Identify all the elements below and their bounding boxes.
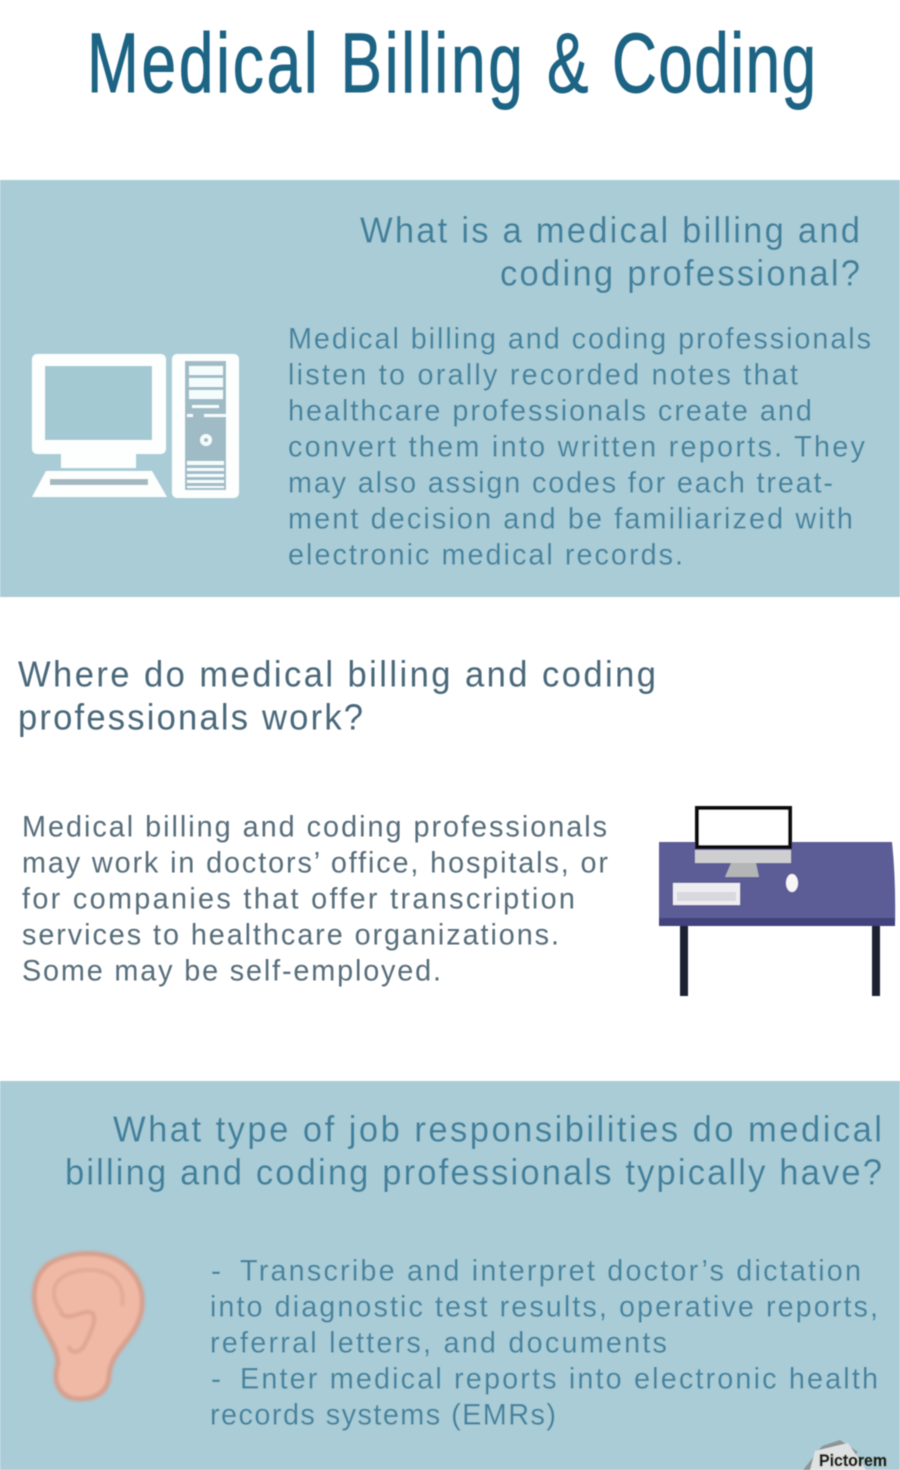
text block: workplaces: for companies that offer transcription (22, 882, 575, 915)
panel: what is a professional (0, 180, 900, 597)
heading: what is a professional: coding professional? (500, 254, 860, 293)
text block: workplaces: services to healthcare organizations. (22, 918, 559, 951)
text block: professional description: electronic medical records. (288, 538, 683, 571)
panel background (0, 1081, 900, 1470)
heading: where they work: Where do medical billing and coding (18, 655, 656, 694)
title: Medical Billing (87, 16, 523, 110)
text block: workplaces: Some may be self-employed. (22, 954, 441, 987)
text block: workplaces: may work in doctors’ office, hospitals, or (22, 846, 608, 879)
text block: responsibilities list: records systems (EMRs) (210, 1398, 556, 1431)
icon: office desk (659, 808, 895, 996)
text block: professional description: Medical billing and coding professionals (288, 322, 871, 355)
heading: what is a professional (360, 211, 860, 293)
text block: responsibilities list: Transcribe and interpret doctor’s dictation (240, 1254, 861, 1287)
heading: where they work: professionals work? (18, 698, 363, 737)
text block: professional description (288, 322, 871, 571)
panel background (0, 180, 900, 597)
text block: professional description: convert them into written reports. They (288, 430, 865, 463)
text block: responsibilities list: into diagnostic test results, operative reports, (210, 1290, 878, 1323)
text block: workplaces: Medical billing and coding professionals (22, 810, 607, 843)
text block: workplaces (22, 810, 608, 987)
heading: job responsibilities: billing and coding professionals typically have? (65, 1153, 882, 1192)
text block: responsibilities list (210, 1254, 878, 1431)
text block: professional description: listen to orally recorded notes that (288, 358, 798, 391)
heading: what is a professional: What is a medical billing and (360, 211, 860, 250)
panel: job responsibilities (0, 1081, 900, 1470)
title: & (547, 16, 588, 110)
heading: job responsibilities (65, 1110, 882, 1192)
text block: professional description: healthcare professionals create and (288, 394, 812, 427)
logo: Pictorem watermark: Pictorem (819, 1451, 887, 1470)
heading: where they work (18, 655, 656, 737)
icon: desktop computer (32, 354, 239, 498)
text block: responsibilities list: referral letters, and documents (210, 1326, 667, 1359)
title: Coding (612, 16, 816, 110)
logo: Pictorem watermark (803, 1440, 887, 1470)
heading: job responsibilities: What type of job responsibilities do medical (113, 1110, 882, 1149)
text block: responsibilities list: Enter medical reports into electronic health (240, 1362, 878, 1395)
text block: responsibilities list: - (211, 1362, 221, 1395)
title (87, 16, 816, 110)
text block: professional description: ment decision and be familiarized with (288, 502, 853, 535)
text block: responsibilities list: - (211, 1254, 221, 1287)
panel: where they work (18, 655, 895, 996)
text block: professional description: may also assign codes for each treat- (288, 466, 833, 499)
icon: ear (34, 1253, 142, 1399)
